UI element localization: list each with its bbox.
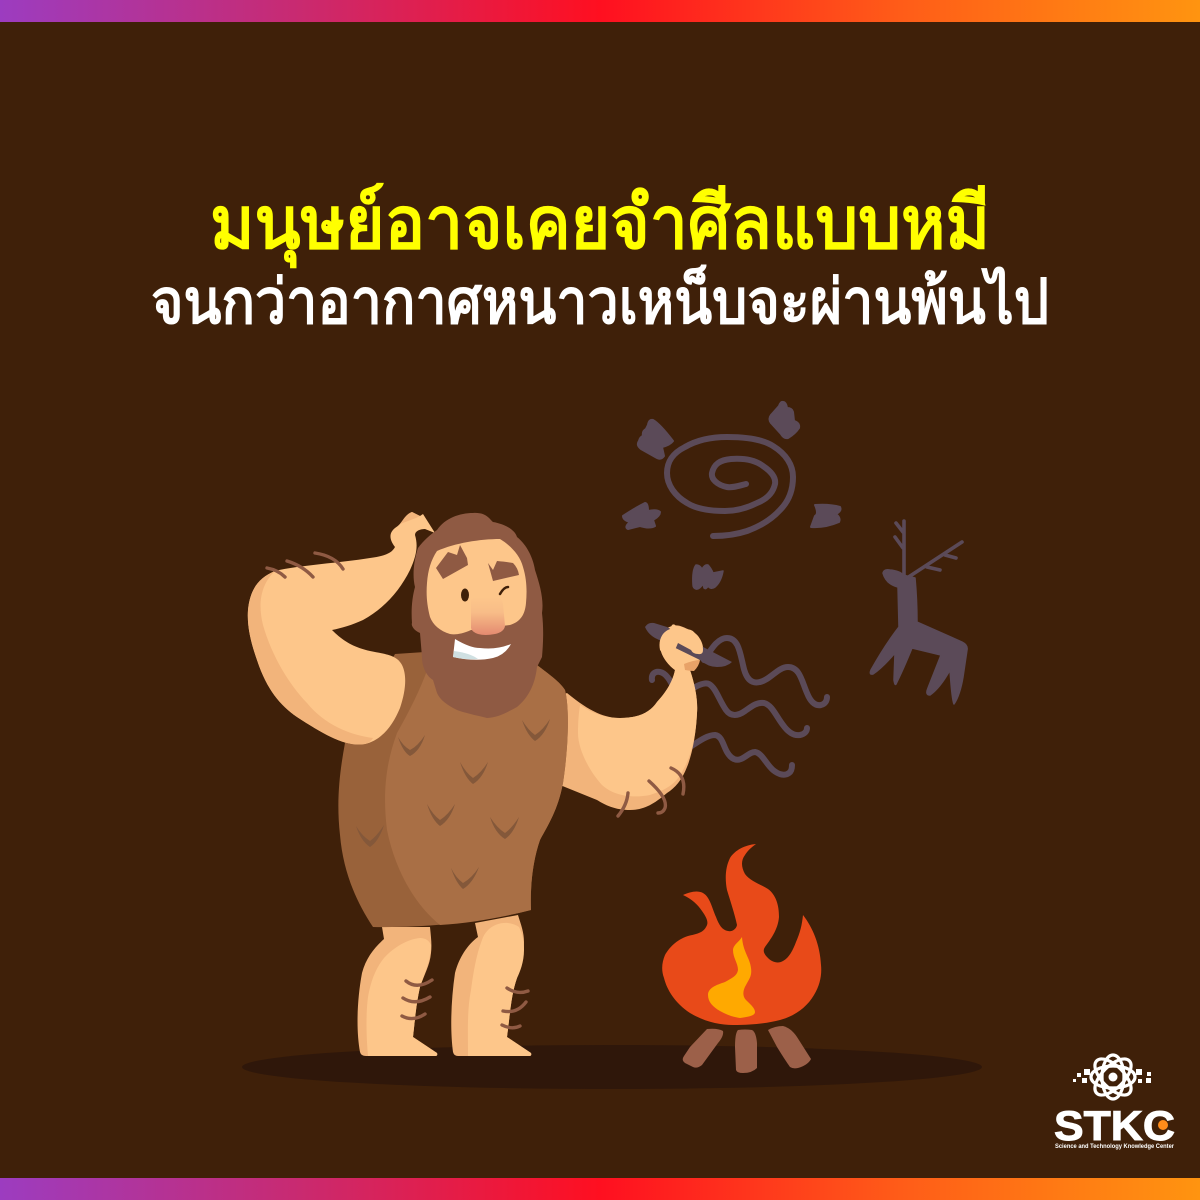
top gradient bar <box>0 0 1200 22</box>
arm hair strokes <box>267 553 684 816</box>
smile <box>453 639 511 660</box>
flame <box>662 844 821 1025</box>
headline: yellow: มนุษย์อาจเคยจำศีลแบบหมี <box>210 183 990 269</box>
wavy line 3 <box>690 735 792 775</box>
STKC wordmark: STKC <box>1054 1102 1175 1149</box>
leg hair strokes <box>402 980 528 1028</box>
head <box>412 513 543 718</box>
hair and beard <box>412 513 543 718</box>
campfire <box>662 844 821 1073</box>
scribble top right <box>770 402 799 438</box>
right leg <box>451 915 531 1056</box>
face <box>427 539 527 634</box>
scribble top left <box>638 420 673 459</box>
orange dot <box>1158 1120 1168 1130</box>
tunic <box>338 652 568 927</box>
fur marks <box>356 719 550 889</box>
nose <box>471 597 505 635</box>
logs <box>683 1026 811 1073</box>
stone tool and hand <box>645 623 732 671</box>
inner flame <box>708 937 755 1018</box>
title <box>151 183 1049 337</box>
atom emblem <box>1089 1053 1137 1101</box>
raised left arm <box>248 512 435 744</box>
scribble right <box>811 505 840 527</box>
spiral sun <box>667 437 793 536</box>
scribble left <box>623 503 660 529</box>
right arm <box>560 625 703 810</box>
winking eye <box>500 587 508 594</box>
wavy line 2 <box>652 672 807 735</box>
left leg <box>358 927 437 1056</box>
ground shadow <box>242 1045 982 1089</box>
logo <box>1054 1053 1175 1150</box>
subheadline: white: จนกว่าอากาศหนาวเหน็บจะผ่านพ้นไป <box>151 264 1049 337</box>
cave drawings <box>623 402 967 775</box>
pixel squares <box>1073 1069 1151 1083</box>
wavy line 1 <box>704 638 827 705</box>
caveman <box>248 512 732 1056</box>
left eye <box>461 588 469 602</box>
logo tagline: Science and Technology Knowledge Center <box>1055 1144 1175 1150</box>
deer <box>870 521 967 704</box>
small scribble <box>693 565 723 589</box>
eyebrows <box>436 545 519 581</box>
bottom gradient bar <box>0 1178 1200 1200</box>
